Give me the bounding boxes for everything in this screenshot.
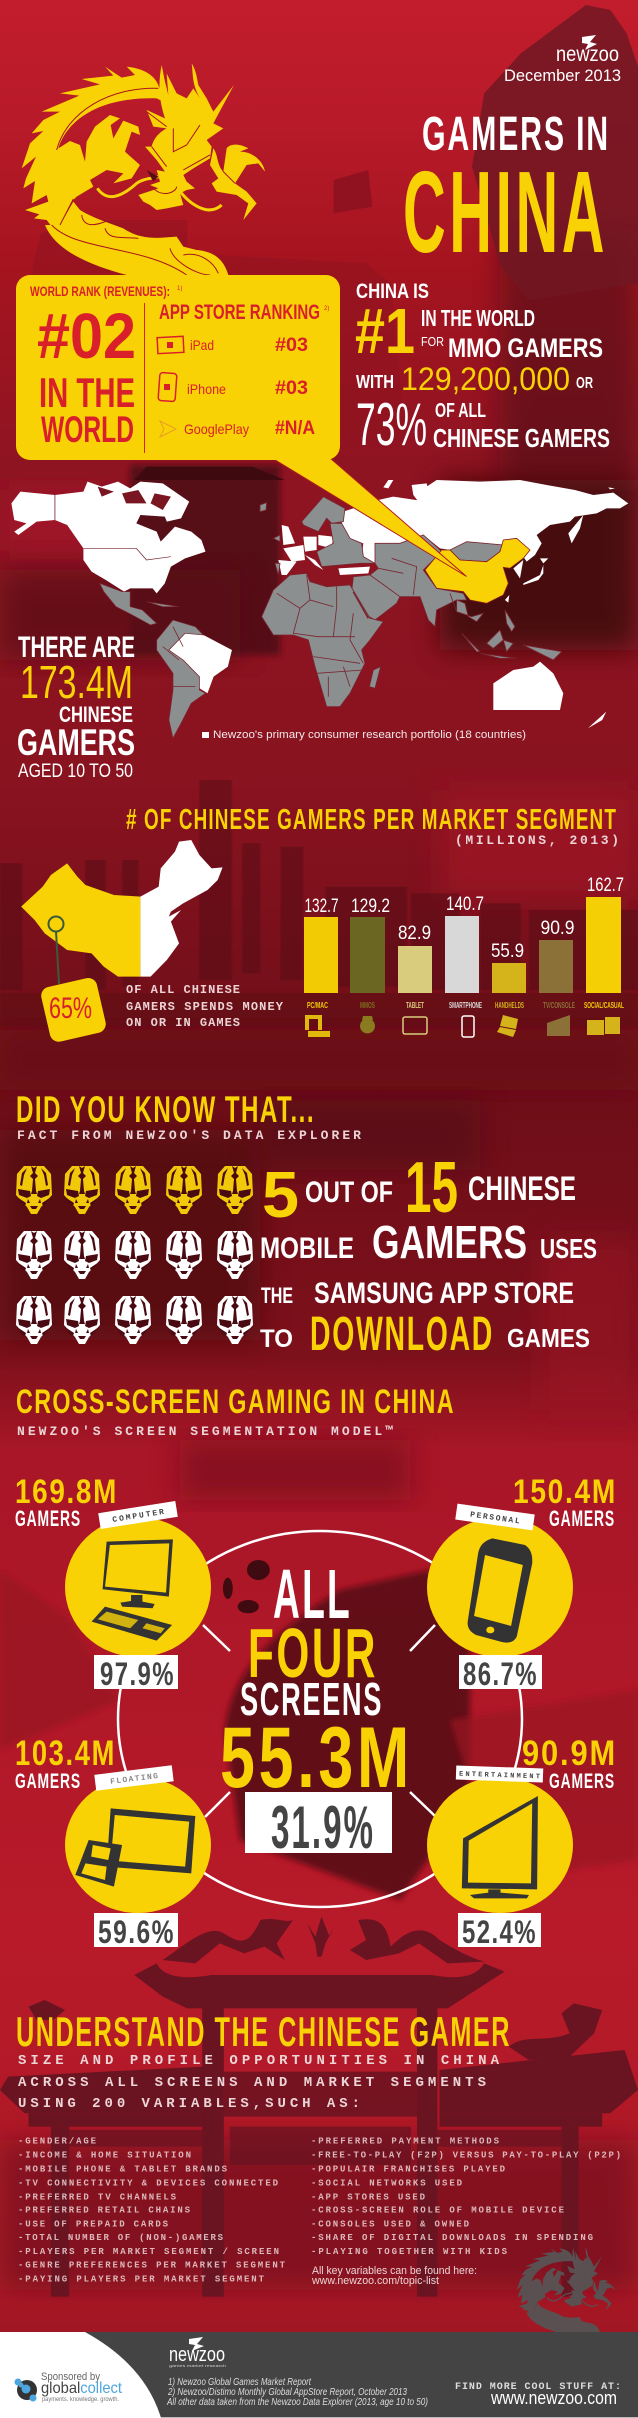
logo: global collect bbox=[14, 2371, 123, 2403]
text: world rank bbox=[30, 283, 182, 450]
icon: pin bbox=[48, 916, 64, 984]
list: variables right column: -APP STORES USED bbox=[311, 2192, 426, 2202]
list: variables right column: -PREFERRED PAYMENT METHODS bbox=[311, 2136, 500, 2146]
logo: global collect: Sponsored by bbox=[41, 2371, 100, 2383]
icon: globe bbox=[360, 1016, 375, 1034]
stat: computer gamers: 169.8M bbox=[15, 1473, 118, 1511]
text: samsung app store fact: CHINESE bbox=[468, 1170, 576, 1208]
text: world rank: #02 bbox=[37, 300, 136, 372]
list: variables right column bbox=[311, 2136, 621, 2257]
tag: personal bbox=[455, 1504, 535, 1530]
screen: personal bbox=[427, 1504, 573, 1692]
logo: global collect: globalcollect bbox=[41, 2380, 123, 2397]
heading: cross-screen gaming bbox=[16, 1383, 455, 1439]
icon: yellow dragon bbox=[22, 63, 265, 275]
text: all four screens: 55.3M bbox=[220, 1710, 413, 1806]
title bbox=[403, 108, 610, 277]
tag: entertainment: ENTERTAINMENT bbox=[459, 1771, 540, 1781]
text: samsung app store fact: USES bbox=[540, 1233, 597, 1264]
bar: tablet bbox=[398, 923, 432, 1010]
logo: global collect: payments. knowledge. growth. bbox=[42, 2397, 119, 2403]
list: variables left column: -GENDER/AGE bbox=[18, 2136, 97, 2146]
text: world rank: IN THE bbox=[39, 369, 135, 416]
map: China highlighted bbox=[425, 538, 530, 603]
value: 31.9: 31.9% bbox=[271, 1794, 375, 1861]
text: world rank: WORLD bbox=[41, 409, 134, 450]
background: temple gate bbox=[0, 1917, 638, 2297]
text: samsung app store fact: GAMERS bbox=[372, 1216, 527, 1268]
legend: research portfolio: Newzoo's primary consumer research portfolio (18 countries) bbox=[213, 729, 526, 741]
text: MMO facts: WITH bbox=[356, 372, 394, 392]
value: 86.7: 86.7% bbox=[463, 1656, 538, 1692]
icon: Google Play bbox=[160, 421, 176, 437]
heading: cross-screen gaming: NEWZOO'S SCREEN SEGMENTATION MODEL™ bbox=[17, 1424, 393, 1439]
icon: iPad bbox=[157, 336, 184, 354]
text: app store ranking: #03 bbox=[275, 378, 308, 399]
list: variables right column: -SOCIAL NETWORKS USED bbox=[311, 2178, 463, 2188]
icon: TV bbox=[547, 1015, 570, 1036]
text: samsung app store fact: GAMES bbox=[507, 1323, 590, 1353]
text: samsung app store fact bbox=[260, 1148, 597, 1361]
map: americas bbox=[11, 482, 232, 738]
text: sources bbox=[166, 2377, 428, 2408]
panel: world rank callout bbox=[16, 275, 340, 460]
panel: footer bbox=[0, 2332, 638, 2418]
stat: floating gamers: GAMERS bbox=[15, 1770, 81, 1793]
logo: newzoo header bbox=[504, 35, 621, 85]
text: MMO facts: 73% bbox=[356, 391, 427, 458]
list: variables left column: -TV CONNECTIVITY & DEVICES CONNECTED bbox=[18, 2178, 279, 2188]
map: China 65 percent bbox=[21, 840, 284, 1044]
list: variables left column: -PLAYERS PER MARKET SEGMENT / SCREEN bbox=[18, 2247, 279, 2257]
diagram: screen segmentation ring bbox=[65, 1501, 573, 1950]
text: MMO facts: 129,200,000 bbox=[401, 361, 570, 397]
screen: entertainment bbox=[427, 1766, 573, 1950]
icon: handheld bbox=[497, 1015, 518, 1037]
map: eurasia africa oceania bbox=[260, 480, 628, 710]
tag: computer: COMPUTER bbox=[112, 1508, 165, 1525]
text: samsung app store fact: 5 bbox=[262, 1158, 299, 1231]
text: all four screens: FOUR bbox=[248, 1614, 378, 1692]
text: app store ranking: #03 bbox=[275, 335, 308, 356]
text: 173.4M chinese gamers: CHINESE bbox=[59, 702, 133, 727]
stat: computer gamers: GAMERS bbox=[15, 1506, 81, 1531]
text: sources: 2) Newzoo/Distimo Monthly Global AppStore Report, October 2013 bbox=[167, 2387, 407, 2398]
stat: floating gamers bbox=[15, 1734, 116, 1793]
list: variables left column: -INCOME & HOME SITUATION bbox=[18, 2150, 191, 2160]
bar chart: gamers per segment bbox=[304, 875, 624, 1037]
logo: newzoo header: December 2013 bbox=[504, 66, 621, 85]
text: samsung app store fact: OUT OF bbox=[305, 1176, 393, 1209]
text: samsung app store fact: MOBILE bbox=[260, 1232, 354, 1265]
tag: floating bbox=[94, 1765, 174, 1791]
text: samsung app store fact: THE bbox=[261, 1283, 293, 1308]
bar: MMOs: MMOS bbox=[360, 1001, 375, 1010]
list: variables left column: -GENRE PREFERENCES PER MARKET SEGMENT bbox=[18, 2261, 286, 2271]
map: callout pointer bbox=[272, 458, 466, 576]
tag: floating: FLOATING bbox=[110, 1772, 159, 1787]
text: samsung app store fact: DOWNLOAD bbox=[310, 1308, 494, 1361]
heading: did you know: FACT FROM NEWZOO'S DATA EXPLORER bbox=[17, 1128, 361, 1143]
text: MMO facts: FOR bbox=[421, 334, 444, 349]
bar: social/casual: 162.7 bbox=[587, 875, 624, 896]
text: MMO facts: #1 bbox=[355, 295, 415, 367]
text: find more: FIND MORE COOL STUFF AT: bbox=[455, 2382, 621, 2393]
heading: cross-screen gaming: CROSS-SCREEN GAMING IN CHINA bbox=[16, 1383, 455, 1421]
text: all four screens: ALL bbox=[273, 1555, 352, 1633]
bar: tablet: 82.9 bbox=[398, 923, 431, 944]
tag: computer bbox=[98, 1501, 178, 1529]
text: MMO facts: IN THE WORLD bbox=[421, 305, 535, 331]
bar: tablet: TABLET bbox=[406, 1001, 424, 1010]
bar: PC/MAC: 132.7 bbox=[304, 896, 338, 917]
list: variables left column: -MOBILE PHONE & TABLET BRANDS bbox=[18, 2164, 228, 2174]
heading: did you know bbox=[16, 1089, 361, 1143]
list: variables left column: -PREFERRED TV CHANNELS bbox=[18, 2192, 177, 2202]
value: 97.9: 97.9% bbox=[100, 1656, 175, 1692]
list: variables left column: -PREFERRED RETAIL CHAINS bbox=[18, 2206, 191, 2216]
heading: market segment: (MILLIONS, 2013) bbox=[455, 833, 619, 848]
icon: smartphone bbox=[462, 1016, 474, 1037]
text: sources: All other data taken from the Newzoo Data Explorer (2013, age 10 to 50) bbox=[166, 2397, 428, 2408]
list: variables right column: -CROSS-SCREEN ROLE OF MOBILE DEVICE bbox=[311, 2206, 565, 2216]
text: MMO facts: MMO GAMERS bbox=[448, 333, 603, 363]
value: 31.9 bbox=[245, 1792, 392, 1861]
text: sources: 1) Newzoo Global Games Market Report bbox=[168, 2377, 312, 2388]
text: MMO facts bbox=[355, 280, 610, 458]
bar: PC/MAC: PC/MAC bbox=[307, 1001, 328, 1010]
heading: understand the chinese gamer bbox=[16, 2008, 511, 2112]
bar: handhelds: 55.9 bbox=[491, 941, 524, 962]
panel: world map bbox=[11, 458, 628, 738]
stat: computer gamers bbox=[15, 1473, 118, 1531]
tag: personal: PERSONAL bbox=[469, 1511, 520, 1526]
logo: newzoo header: newzoo bbox=[556, 43, 619, 66]
value: 59.6: 59.6% bbox=[98, 1914, 175, 1950]
bar: smartphone bbox=[445, 894, 484, 1010]
text: app store ranking: 2) bbox=[324, 306, 329, 312]
text: 173.4M chinese gamers bbox=[17, 631, 135, 782]
text: world rank: 1) bbox=[177, 286, 182, 292]
text: app store ranking: iPad bbox=[190, 337, 214, 353]
text: app store ranking: APP STORE RANKING bbox=[159, 301, 320, 324]
logo: newzoo footer bbox=[169, 2337, 226, 2368]
background: panda ears bbox=[223, 1560, 270, 1613]
text: spending note: ON OR IN GAMES bbox=[126, 1016, 240, 1030]
text: 173.4M chinese gamers: AGED 10 TO 50 bbox=[18, 761, 133, 782]
bar: handhelds: HANDHELDS bbox=[495, 1001, 524, 1010]
icon: iPhone bbox=[158, 372, 177, 402]
list: variables right column: -PLAYING TOGETHER WITH KIDS bbox=[311, 2247, 508, 2257]
text: samsung app store fact: TO bbox=[260, 1325, 293, 1353]
text: MMO facts: OF ALL bbox=[435, 400, 486, 422]
text: MMO facts: OR bbox=[576, 375, 593, 392]
text: all four screens bbox=[220, 1555, 413, 1806]
badge: 65 percent: 65% bbox=[49, 992, 92, 1025]
list: variables left column: -USE OF PREPAID CARDS bbox=[18, 2220, 169, 2230]
list: variables left column bbox=[18, 2136, 286, 2285]
text: 173.4M chinese gamers: GAMERS bbox=[17, 722, 135, 763]
background: great wall and rock bbox=[33, 5, 638, 480]
bar: TV/console: 90.9 bbox=[540, 918, 574, 939]
text: samsung app store fact: 15 bbox=[405, 1148, 458, 1228]
text: all four screens: SCREENS bbox=[240, 1673, 383, 1725]
icon: tablet bbox=[403, 1017, 427, 1034]
bar: smartphone: SMARTPHONE bbox=[449, 1001, 482, 1010]
text: spending note: OF ALL CHINESE bbox=[126, 983, 240, 997]
icons: opera masks grid bbox=[16, 1166, 253, 1344]
bar: TV/console bbox=[539, 918, 575, 1010]
list: variables left column: -PAYING PLAYERS PER MARKET SEGMENT bbox=[18, 2275, 265, 2285]
text: find more: www.newzoo.com bbox=[490, 2388, 617, 2408]
stat: personal gamers: 150.4M bbox=[513, 1473, 617, 1511]
list: variables right column: -SHARE OF DIGITAL DOWNLOADS IN SPENDING bbox=[311, 2233, 593, 2243]
stat: entertainment gamers: 90.9M bbox=[522, 1734, 617, 1773]
bar: social/casual bbox=[584, 875, 624, 1010]
text: world rank: WORLD RANK (REVENUES): bbox=[30, 283, 170, 299]
text: samsung app store fact: SAMSUNG APP STORE bbox=[314, 1277, 574, 1310]
tag: entertainment bbox=[456, 1766, 543, 1783]
heading: did you know: DID YOU KNOW THAT... bbox=[16, 1089, 315, 1130]
text: app store ranking bbox=[159, 301, 329, 439]
list: variables right column: -POPULAIR FRANCHISES PLAYED bbox=[311, 2164, 506, 2174]
stat: entertainment gamers bbox=[522, 1734, 617, 1793]
logo: newzoo footer: newzoo bbox=[169, 2344, 225, 2366]
background: skyline of Shanghai bbox=[0, 780, 638, 1027]
heading: understand the chinese gamer: SIZE AND PROFILE OPPORTUNITIES IN CHINA bbox=[18, 2053, 500, 2069]
list: variables right column: -FREE-TO-PLAY (F2P) VERSUS PAY-TO-PLAY (P2P) bbox=[311, 2150, 621, 2160]
badge: 65 percent bbox=[39, 976, 108, 1044]
stat: floating gamers: 103.4M bbox=[15, 1734, 116, 1773]
logo: newzoo footer: games market research bbox=[169, 2363, 226, 2368]
text: 173.4M chinese gamers: THERE ARE bbox=[18, 631, 135, 664]
heading: understand the chinese gamer: USING 200 VARIABLES,SUCH AS: bbox=[18, 2096, 360, 2112]
text: topic list link: www.newzoo.com/topic-list bbox=[311, 2275, 439, 2287]
icon: grey dragon bbox=[517, 2247, 615, 2333]
bar: TV/console: TV/CONSOLE bbox=[543, 1001, 575, 1010]
heading: understand the chinese gamer: ACROSS ALL SCREENS AND MARKET SEGMENTS bbox=[18, 2075, 486, 2091]
bar: MMOs: 129.2 bbox=[351, 896, 390, 917]
text: spending note bbox=[126, 983, 284, 1030]
text: 173.4M chinese gamers: 173.4M bbox=[20, 656, 133, 708]
text: app store ranking: iPhone bbox=[187, 381, 226, 397]
text: spending note: GAMERS SPENDS MONEY bbox=[126, 1000, 284, 1014]
bar: PC/MAC bbox=[304, 896, 338, 1010]
text: app store ranking: #N/A bbox=[275, 418, 315, 439]
stat: personal gamers bbox=[513, 1473, 617, 1531]
screen: computer bbox=[65, 1501, 211, 1692]
bar: smartphone: 140.7 bbox=[446, 894, 484, 915]
text: topic list link bbox=[311, 2265, 477, 2287]
screen: floating bbox=[65, 1765, 211, 1950]
text: find more bbox=[455, 2382, 621, 2408]
list: variables left column: -TOTAL NUMBER OF (NON-)GAMERS bbox=[18, 2233, 224, 2243]
value: 52.4: 52.4% bbox=[462, 1914, 537, 1950]
list: variables right column: -CONSOLES USED & OWNED bbox=[311, 2220, 470, 2230]
icon: social bbox=[587, 1017, 620, 1035]
icon: PC/MAC bbox=[305, 1015, 330, 1037]
text: app store ranking: GooglePlay bbox=[184, 421, 249, 437]
bar: handhelds bbox=[491, 941, 526, 1010]
text: topic list link: All key variables can be found here: bbox=[312, 2265, 477, 2277]
text: MMO facts: CHINA IS bbox=[356, 280, 429, 303]
bar: MMOs bbox=[350, 896, 390, 1010]
